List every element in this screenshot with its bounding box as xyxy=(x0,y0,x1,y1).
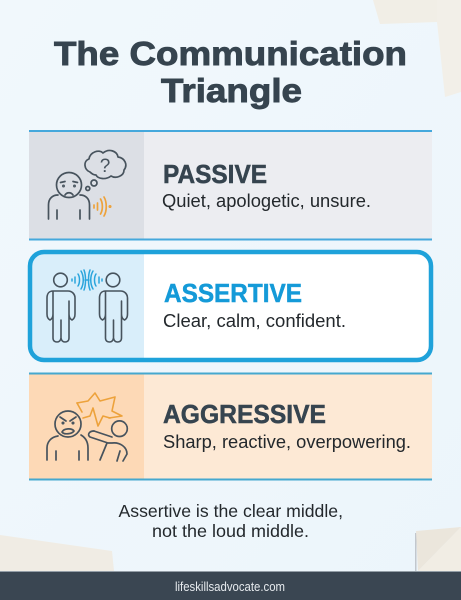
footer bar xyxy=(0,572,461,600)
panel: assertive xyxy=(30,252,431,360)
description: passive: Quiet, apologetic, unsure. xyxy=(162,191,371,211)
icon: angry person and recoiling person xyxy=(47,411,127,461)
heading: assertive: ASSERTIVE xyxy=(164,278,302,308)
title: The Communication xyxy=(54,36,407,73)
icon: two people exchanging sound waves xyxy=(47,273,128,342)
title xyxy=(54,36,407,110)
heading: passive: PASSIVE xyxy=(163,159,267,189)
closing statement: Assertive is the clear middle, xyxy=(118,501,343,521)
panel: passive xyxy=(29,130,432,240)
closing statement xyxy=(118,501,343,541)
title: Triangle xyxy=(161,73,302,110)
icon: connecting waves xyxy=(72,270,102,290)
icon: worried person with thought bubble xyxy=(48,150,126,219)
heading: aggressive: AGGRESSIVE xyxy=(163,399,326,429)
panel: aggressive xyxy=(29,372,432,480)
icon: burst of anger xyxy=(77,393,122,426)
icon: quiet sound waves xyxy=(94,197,111,216)
icon: worried person with thought bubble: ? xyxy=(100,156,110,177)
closing statement: not the loud middle. xyxy=(152,521,309,541)
description: aggressive: Sharp, reactive, overpowering. xyxy=(163,432,411,452)
description: assertive: Clear, calm, confident. xyxy=(163,311,346,331)
corner paper fold xyxy=(416,527,461,571)
footer bar: lifeskillsadvocate.com xyxy=(175,579,285,594)
